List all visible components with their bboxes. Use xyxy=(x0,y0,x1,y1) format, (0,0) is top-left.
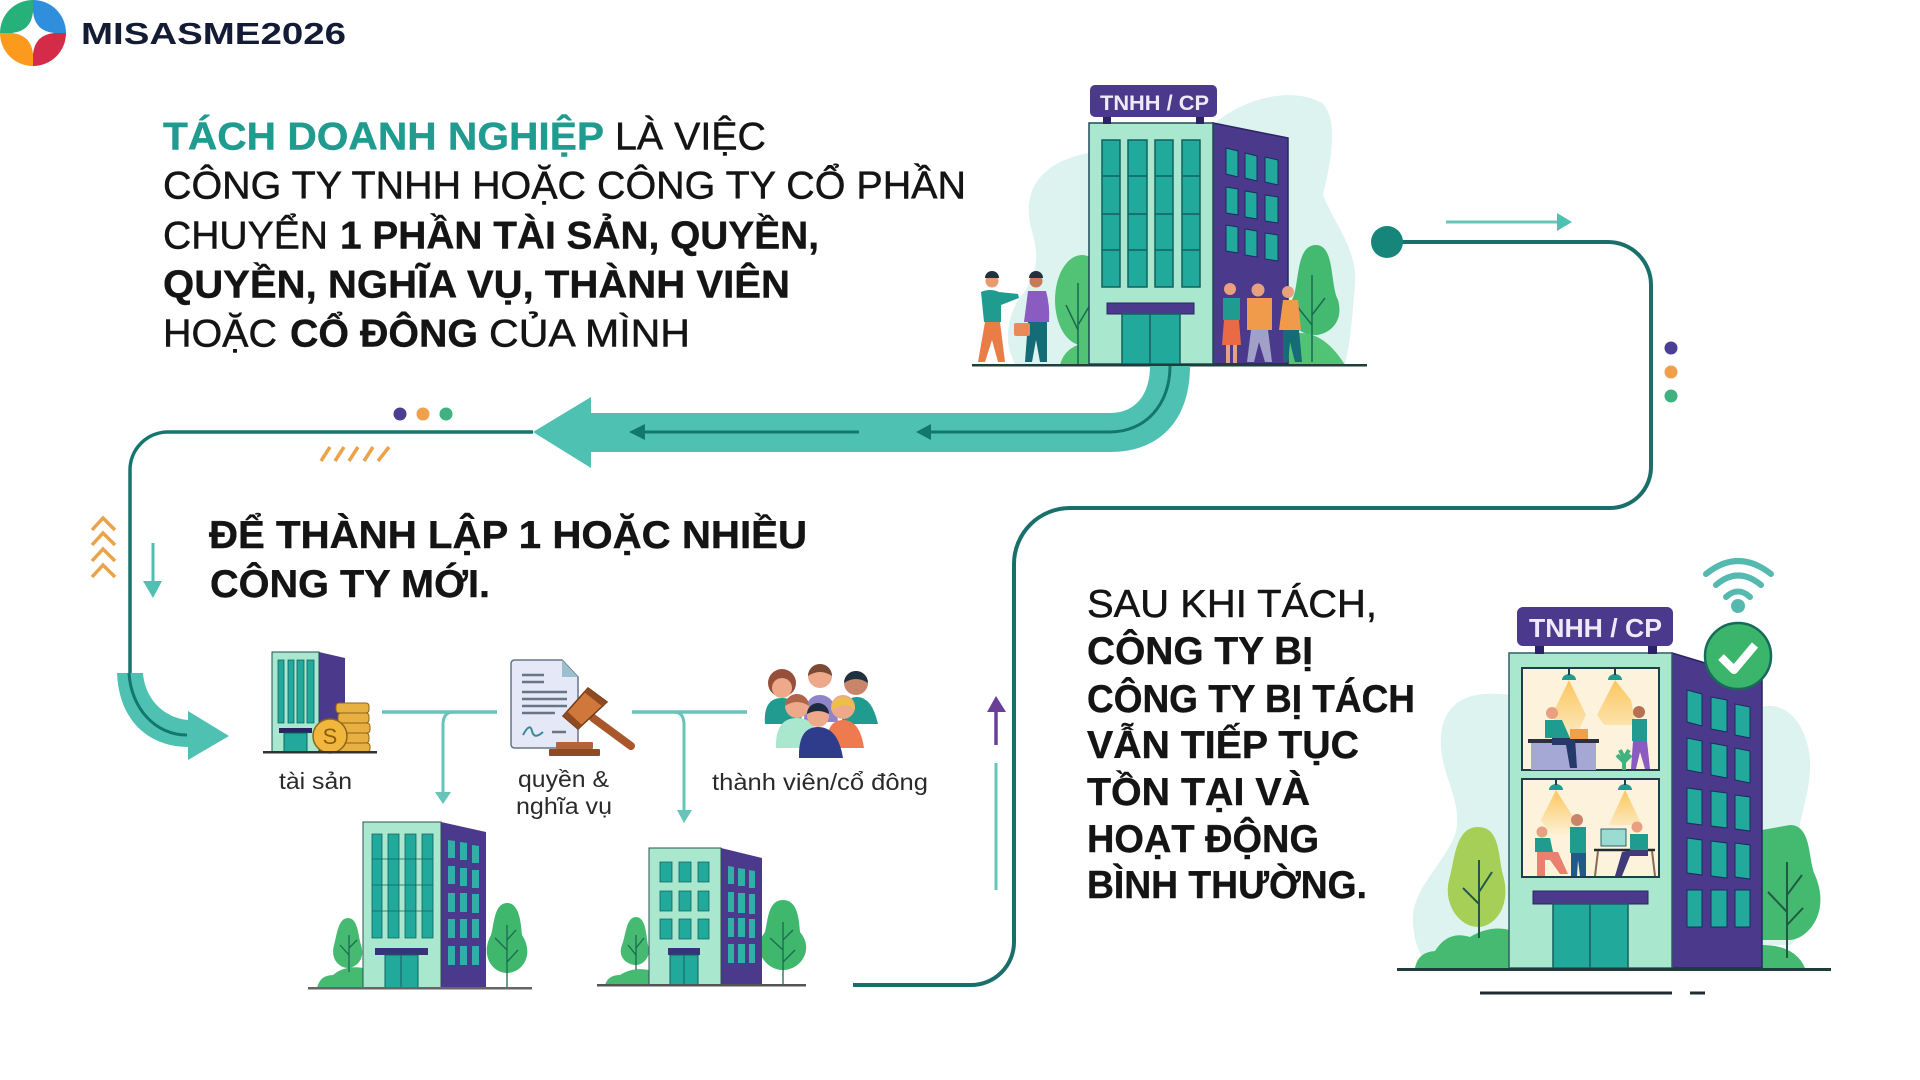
result text block: CÔNG TY BỊ xyxy=(1087,628,1313,673)
result text block: CÔNG TY BỊ TÁCH xyxy=(1087,676,1415,721)
result text block: HOẠT ĐỘNG xyxy=(1087,816,1319,861)
result text block: VẪN TIẾP TỤC xyxy=(1087,723,1359,767)
label: assets: tài sản xyxy=(279,768,352,794)
logo xyxy=(0,0,346,66)
office room upper xyxy=(1522,668,1659,770)
intro text block: 1 PHẦN TÀI SẢN, QUYỀN, xyxy=(340,214,819,258)
second heading: CÔNG TY MỚI. xyxy=(210,561,490,606)
small right arrow xyxy=(1446,213,1572,231)
big arrow from building xyxy=(533,366,1190,468)
result text block: SAU KHI TÁCH, xyxy=(1087,583,1377,626)
icon: assets building and coins: S xyxy=(323,724,337,749)
three dots right xyxy=(1664,342,1678,402)
sign TNHH / CP xyxy=(1090,85,1217,124)
orange slashes xyxy=(321,447,389,461)
intro text block: CHUYỂN xyxy=(163,212,328,258)
sign TNHH / CP xyxy=(1517,607,1673,654)
intro text block: LÀ VIỆC xyxy=(615,116,766,158)
ground line xyxy=(1397,968,1831,971)
building front xyxy=(1089,123,1213,364)
icon: assets building and coins xyxy=(263,652,377,754)
icon: members group xyxy=(765,664,878,758)
inner arrow lines xyxy=(629,366,1170,440)
label: rights and obligations: quyền & xyxy=(518,766,609,792)
right tree xyxy=(1762,825,1820,968)
orange chevrons xyxy=(92,518,115,577)
result text block xyxy=(1087,583,1415,907)
small down arrow xyxy=(143,543,162,598)
second heading: ĐỂ THÀNH LẬP 1 HOẶC NHIỀU xyxy=(209,512,807,557)
intro text block: TÁCH DOANH NGHIỆP xyxy=(163,114,604,158)
new company building A xyxy=(308,822,532,990)
sign TNHH / CP: TNHH / CP xyxy=(1100,92,1209,115)
result text block: BÌNH THƯỜNG. xyxy=(1087,863,1367,907)
small purple up arrow xyxy=(987,696,1006,745)
three dots top xyxy=(394,408,452,420)
connector line left xyxy=(130,432,533,674)
connector: assets to new company 1 xyxy=(382,712,497,804)
second heading xyxy=(209,512,807,606)
icon: wifi xyxy=(1706,561,1771,610)
connector: rights to new company 2 xyxy=(632,712,747,823)
main connector path xyxy=(853,226,1651,985)
building: company after split xyxy=(1397,561,1831,993)
building: original company with people xyxy=(972,85,1367,366)
new company building B xyxy=(597,848,806,986)
result text block: TỒN TẠI VÀ xyxy=(1087,770,1310,814)
logo wordmark: MISASME2026 xyxy=(81,16,346,51)
intro text block xyxy=(163,114,966,356)
sign TNHH / CP: TNHH / CP xyxy=(1529,613,1662,643)
icon: document and gavel xyxy=(511,660,631,756)
teal vertical line xyxy=(994,763,998,890)
people: two colleagues xyxy=(978,271,1049,362)
logo mark xyxy=(0,0,66,66)
side wall xyxy=(1672,653,1762,968)
left tree xyxy=(1055,255,1109,365)
right tree xyxy=(1288,245,1345,365)
entrance xyxy=(1533,891,1648,968)
background blobs xyxy=(1413,694,1810,968)
under-ground dashes xyxy=(1480,992,1705,994)
label: rights and obligations: nghĩa vụ xyxy=(516,793,612,819)
people: three employees xyxy=(1222,283,1302,363)
intro text block: QUYỀN, NGHĨA VỤ, THÀNH VIÊN xyxy=(163,262,790,306)
intro text block: CÔNG TY TNHH HOẶC CÔNG TY CỔ PHẦN xyxy=(163,162,966,208)
ground line xyxy=(972,364,1367,366)
intro text block: HOẶC xyxy=(163,312,277,356)
label: rights and obligations xyxy=(516,766,612,819)
icon: check badge xyxy=(1705,623,1771,689)
label: members and shareholders: thành viên/cổ đông xyxy=(712,769,928,795)
building side wall xyxy=(1213,123,1288,364)
intro text block: CỔ ĐÔNG xyxy=(290,310,478,356)
front wall xyxy=(1509,653,1672,968)
intro text block: CỦA MÌNH xyxy=(489,312,690,356)
left tree xyxy=(1415,827,1510,968)
office room lower xyxy=(1522,779,1659,877)
curved arrow to assets xyxy=(117,673,229,760)
background blobs xyxy=(1008,95,1355,364)
